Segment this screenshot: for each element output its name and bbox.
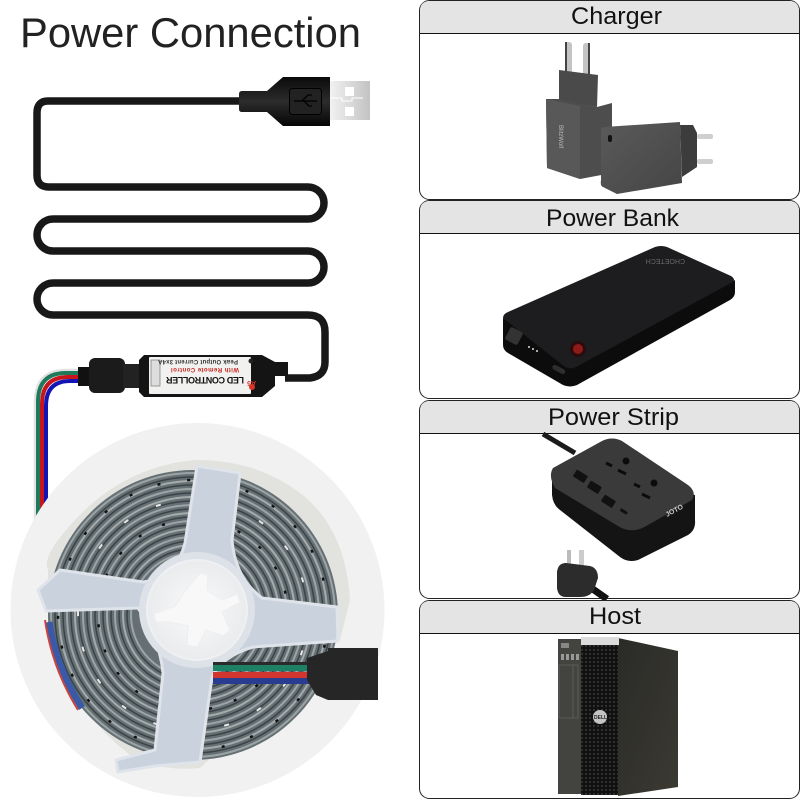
- reel disc: [10, 423, 384, 797]
- LED controller: With Remote Control: [171, 366, 239, 372]
- icon: power bank: CHOETECH: [646, 257, 685, 264]
- title: Power Connection: [20, 9, 361, 56]
- LED controller: A5: [247, 379, 256, 386]
- power strip heading: [420, 401, 799, 434]
- host heading: [420, 601, 799, 634]
- tape connector: [213, 648, 378, 700]
- icon: tower computer: DELL: [594, 715, 607, 721]
- LED strip reel: [10, 423, 384, 797]
- icon: chargers: BlitzWolf: [557, 125, 563, 149]
- hub: [139, 552, 255, 668]
- USB cable: [37, 77, 370, 378]
- panel: charger: [420, 0, 800, 200]
- power strip heading: Power Strip: [548, 404, 679, 431]
- icon: power strip: JOTO: [665, 503, 685, 519]
- power bank heading: [420, 201, 799, 234]
- host heading: Host: [589, 603, 641, 630]
- panel: power strip: [420, 400, 800, 599]
- strip end wires: [45, 620, 82, 710]
- RGB wires: [35, 370, 82, 530]
- icon: power strip: [543, 434, 695, 599]
- USB plug: [239, 77, 370, 126]
- icon: tower computer: [558, 637, 678, 796]
- charger heading: [420, 1, 799, 34]
- spokes: [38, 466, 338, 772]
- icon: chargers: [546, 42, 713, 194]
- LED controller: Peak Output Current 3x4A: [157, 358, 238, 364]
- LED controller: [78, 355, 288, 397]
- icon: power bank: [503, 246, 735, 386]
- power bank heading: Power Bank: [546, 205, 680, 232]
- coiled LED tape: [48, 470, 338, 760]
- charger heading: Charger: [571, 3, 662, 30]
- LED controller: LED CONTROLLER: [166, 375, 244, 385]
- panel: host: [420, 600, 800, 798]
- panel: power bank: [420, 200, 800, 398]
